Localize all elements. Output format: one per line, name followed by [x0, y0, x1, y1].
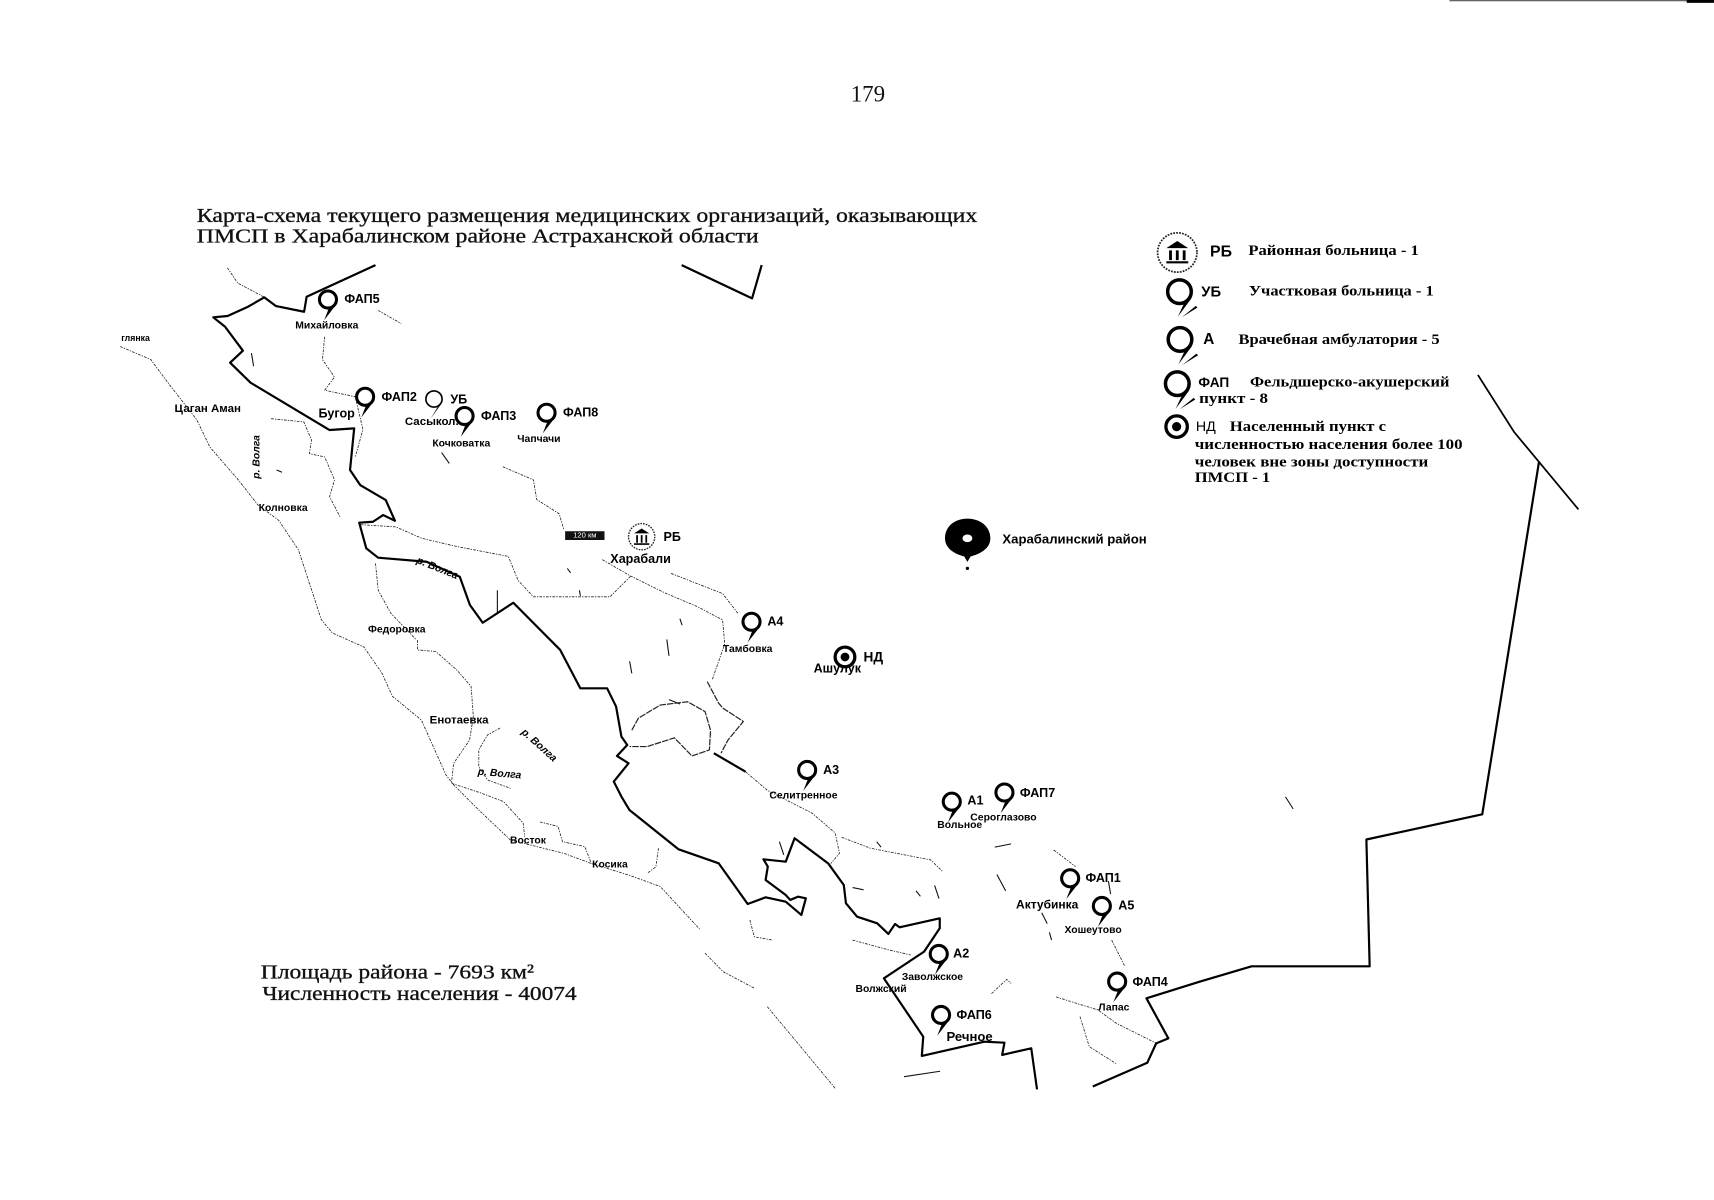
- legend: А: Врачебная амбулатория - 5: [1238, 332, 1440, 348]
- pin: ФАП3: [456, 408, 516, 437]
- legend: НД: НД: [1196, 419, 1216, 435]
- pin: ФАП7: ФАП7: [1020, 786, 1055, 800]
- legend: [1158, 233, 1463, 486]
- settlement labels: Федоровка: [368, 624, 426, 635]
- legend: НД: человек вне зоны доступности: [1195, 455, 1428, 471]
- settlement labels: Сероглазово: [970, 812, 1037, 823]
- map: rivers and channels: [120, 268, 1293, 1088]
- legend: НД: [1166, 416, 1463, 486]
- legend: НД: численностью населения более 100: [1195, 437, 1463, 453]
- pin: А3: А3: [823, 763, 839, 777]
- pin: А4: А4: [767, 614, 783, 628]
- pin: ФАП1: ФАП1: [1085, 871, 1121, 885]
- pin: А1: [943, 793, 983, 822]
- settlement labels: Вольное: [937, 820, 982, 831]
- settlement labels: [121, 320, 1130, 1044]
- district statistics text: Численность населения - 40074: [262, 983, 577, 1005]
- settlement labels: Хошеутово: [1065, 925, 1122, 936]
- settlement labels: Тамбовка: [723, 643, 773, 655]
- pin: УБ: УБ: [450, 392, 467, 406]
- settlement labels: р. Волга: [414, 555, 460, 582]
- title: Карта-схема текущего размещения медицинских организаций, оказывающих: [197, 205, 977, 227]
- settlement labels: Ашулук: [814, 661, 862, 675]
- pin: ФАП2: [357, 388, 417, 418]
- pin: А1: А1: [967, 794, 983, 808]
- pin: А2: А2: [953, 947, 969, 961]
- legend: ФАП: [1165, 372, 1449, 409]
- settlement labels: Косика: [592, 859, 628, 870]
- title: ПМСП в Харабалинском районе Астраханской области: [197, 226, 759, 248]
- settlement labels: Селитренное: [769, 791, 838, 802]
- legend: ФАП: Фельдшерско-акушерский: [1250, 374, 1449, 390]
- map: district boundary: [213, 265, 1578, 1089]
- pin: А3: [799, 761, 839, 791]
- pin: ФАП4: [1109, 973, 1168, 1002]
- pin: ФАП7: [996, 784, 1055, 813]
- legend: УБ: Участковая больница - 1: [1249, 284, 1434, 300]
- big pin: Харабалинский район: [945, 519, 1147, 570]
- road sign: [565, 531, 604, 540]
- icon: НД settlement on map: [835, 647, 883, 667]
- settlement labels: глянка: [121, 333, 150, 343]
- legend: ФАП: ФАП: [1198, 375, 1229, 390]
- legend: НД: Населенный пункт с: [1230, 419, 1386, 435]
- settlement labels: Колновка: [259, 503, 308, 514]
- pin: А5: [1093, 897, 1134, 927]
- pin: ФАП3: ФАП3: [481, 409, 516, 423]
- settlement labels: Речное: [946, 1029, 993, 1044]
- settlement labels: Актубинка: [1016, 897, 1079, 911]
- road sign: 120 км: [573, 531, 597, 540]
- big pin: Харабалинский район: Харабалинский район: [1002, 532, 1147, 546]
- icon: НД settlement on map: НД: [864, 650, 883, 665]
- district statistics text: [261, 961, 577, 1005]
- pin: ФАП2: ФАП2: [382, 390, 417, 404]
- settlement labels: Бугор: [319, 407, 355, 421]
- settlement labels: Чапчачи: [517, 434, 561, 445]
- district statistics text: Площадь района - 7693 км²: [261, 961, 534, 983]
- legend: РБ: РБ: [1210, 244, 1232, 261]
- legend: НД: ПМСП - 1: [1195, 470, 1270, 486]
- settlement labels: Восток: [510, 835, 547, 846]
- settlement labels: р. Волга: [252, 435, 263, 480]
- legend: УБ: УБ: [1201, 284, 1222, 300]
- pin: УБ: [426, 391, 467, 419]
- settlement labels: Волжский: [855, 984, 907, 995]
- pin: ФАП5: ФАП5: [344, 292, 380, 306]
- settlement labels: р. Волга: [476, 767, 522, 782]
- pin: ФАП6: [933, 1006, 992, 1036]
- icon: РБ district hospital on map: [629, 524, 681, 550]
- settlement labels: Цаган Аман: [175, 403, 241, 415]
- pin: ФАП4: ФАП4: [1132, 975, 1168, 989]
- legend: А: А: [1203, 331, 1214, 348]
- legend: РБ: [1158, 233, 1419, 272]
- pin: А4: [743, 613, 783, 643]
- legend: ФАП: пункт - 8: [1199, 391, 1268, 407]
- settlement labels: Лапас: [1098, 1003, 1130, 1014]
- pin: ФАП6: ФАП6: [956, 1008, 992, 1022]
- pin: А5: А5: [1118, 899, 1134, 913]
- settlement labels: Михайловка: [295, 320, 359, 331]
- settlement labels: Кочковатка: [432, 439, 490, 450]
- settlement labels: Заволжское: [902, 972, 963, 983]
- settlement labels: Сасыкол.: [405, 416, 459, 428]
- page number: 179: [851, 82, 885, 107]
- settlement labels: р. Волга: [518, 726, 559, 764]
- pin: ФАП8: ФАП8: [563, 406, 598, 420]
- scan edge line: [1449, 0, 1714, 3]
- pin: ФАП1: [1062, 870, 1121, 899]
- pin: А2: [930, 945, 969, 975]
- icon: РБ district hospital on map: РБ: [664, 530, 681, 544]
- settlement labels: Харабали: [610, 552, 671, 566]
- legend: УБ: [1168, 280, 1434, 317]
- legend: А: [1168, 328, 1440, 365]
- pin: ФАП8: [538, 404, 598, 434]
- pin: ФАП5: [319, 291, 380, 320]
- legend: РБ: Районная больница - 1: [1248, 243, 1419, 259]
- title: [197, 205, 977, 248]
- settlement labels: Енотаевка: [430, 714, 489, 726]
